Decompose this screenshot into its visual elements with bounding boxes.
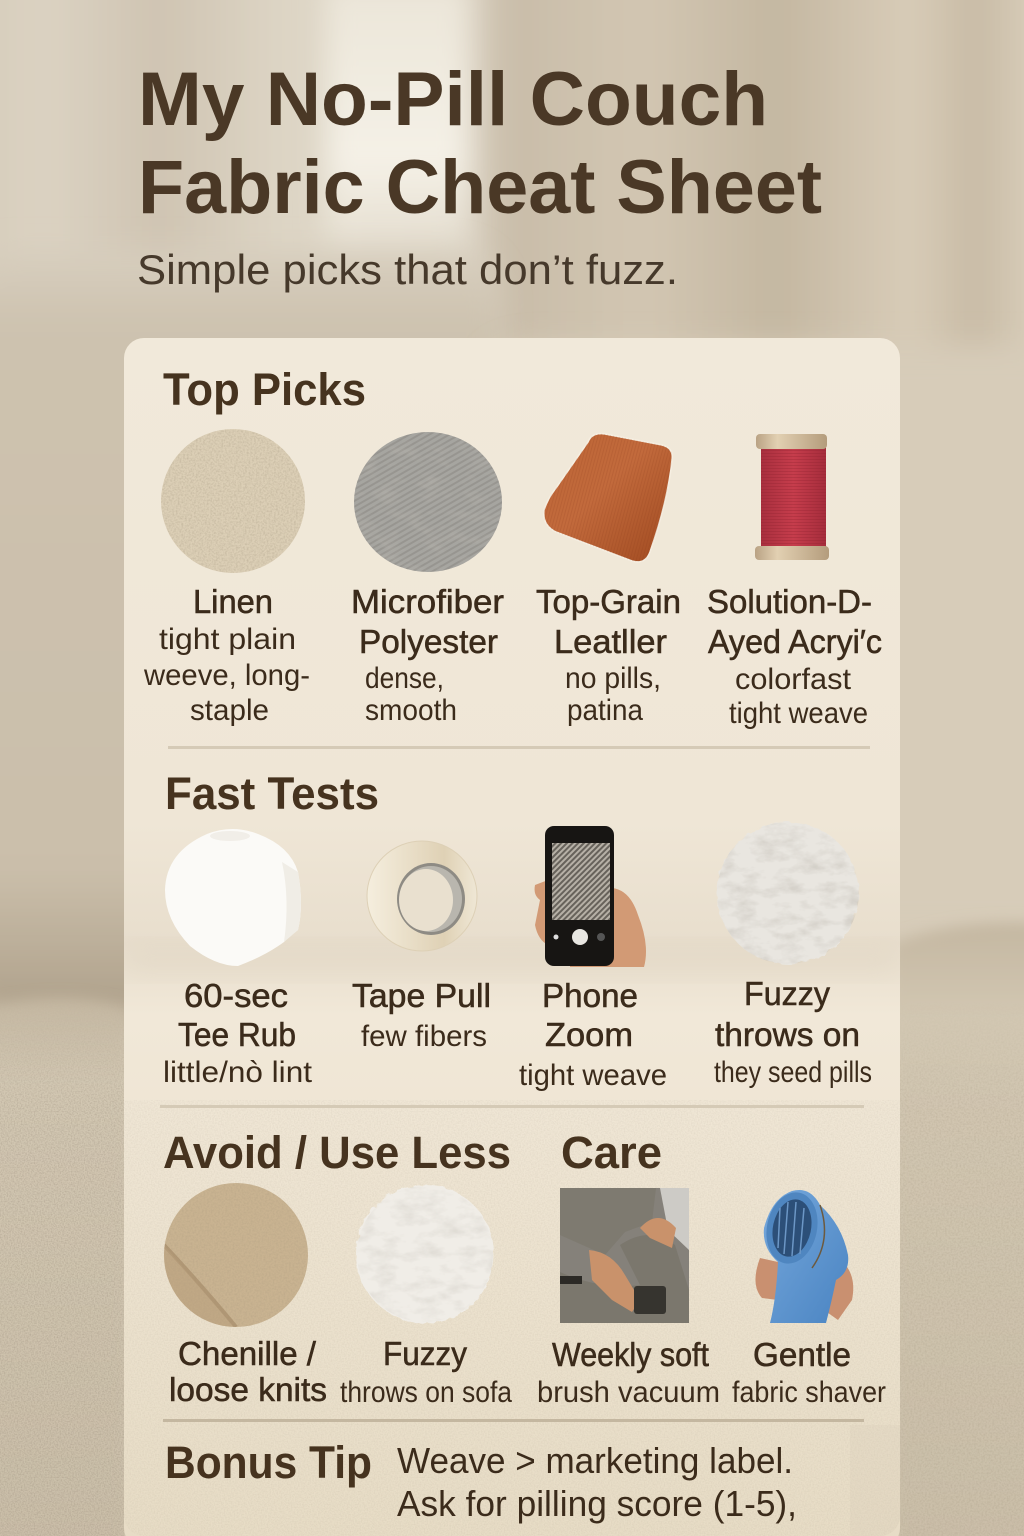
icon: fuzzy throw swatch	[716, 821, 860, 965]
label: fabric shaver: Gentle	[753, 1336, 851, 1373]
label: weekly brush vacuum: brush vacuum	[537, 1376, 720, 1409]
label: fuzzy throws on sofa: throws on sofa	[340, 1376, 512, 1409]
label: weekly brush vacuum	[537, 1336, 720, 1409]
label: microfiber polyester: smooth	[365, 694, 457, 727]
title	[138, 57, 822, 230]
icon: linen swatch	[160, 428, 306, 574]
label: chenille	[169, 1335, 327, 1408]
label: tee rub: 60-sec	[184, 977, 288, 1014]
label: fabric shaver: fabric shaver	[732, 1376, 886, 1409]
text: bonus tip body	[397, 1440, 797, 1524]
heading: Avoid / Use Less: Avoid / Use Less	[163, 1127, 511, 1178]
label: fuzzy throws on sofa: Fuzzy	[383, 1335, 467, 1372]
text: bonus tip body: Ask for pilling score (1-5),	[397, 1483, 797, 1524]
label: fuzzy throws on sofa	[340, 1335, 512, 1409]
label: phone zoom	[519, 977, 667, 1092]
label: fuzzy throws: Fuzzy	[744, 975, 830, 1012]
label: phone zoom: tight weave	[519, 1059, 667, 1092]
icon: tape roll	[367, 841, 477, 951]
label: fuzzy throws: they seed pills	[714, 1056, 872, 1089]
label: chenille: loose knits	[169, 1371, 327, 1408]
icon: microfiber swatch	[354, 432, 502, 572]
label: microfiber polyester: Microfiber	[351, 583, 504, 620]
icon: red thread spool	[755, 434, 829, 560]
label: top-grain leather: patina	[567, 694, 643, 727]
label: linen	[143, 583, 310, 727]
icon: chenille swatch	[164, 1183, 308, 1327]
title: Fabric Cheat Sheet	[138, 145, 822, 230]
icon: fuzzy throw	[352, 1181, 498, 1327]
heading: Bonus Tip: Bonus Tip	[165, 1437, 372, 1488]
label: phone zoom: Phone	[542, 977, 638, 1014]
label: microfiber polyester: Polyester	[359, 623, 498, 660]
label: weekly brush vacuum: Weekly soft	[552, 1336, 709, 1373]
label: linen: weeve, long-	[143, 659, 310, 692]
label: tee rub: little/nò lint	[163, 1056, 313, 1089]
label: linen: tight plain	[159, 623, 296, 656]
label: tape pull	[352, 977, 491, 1053]
heading: Care: Care	[561, 1127, 662, 1178]
icon: white tee	[165, 829, 301, 966]
label: fuzzy throws	[714, 975, 872, 1089]
label: top-grain leather: no pills,	[565, 662, 661, 695]
label: top-grain leather: Top-Grain	[536, 583, 681, 620]
label: solution-dyed acrylic: Ayed Acryi′c	[708, 623, 882, 660]
icon: leather swatch	[544, 434, 672, 562]
label: top-grain leather	[536, 583, 681, 727]
label: solution-dyed acrylic	[707, 583, 882, 730]
label: phone zoom: Zoom	[545, 1016, 633, 1053]
label: tape pull: Tape Pull	[352, 977, 491, 1014]
label: top-grain leather: Leatller	[554, 623, 667, 660]
label: fuzzy throws: throws on	[715, 1016, 860, 1053]
main panel	[124, 338, 900, 1536]
icon: fabric shaver	[755, 1188, 853, 1323]
heading: Fast Tests: Fast Tests	[165, 768, 379, 819]
label: microfiber polyester: dense,	[365, 662, 444, 695]
heading: Top Picks: Top Picks	[163, 364, 366, 415]
label: tee rub	[163, 977, 313, 1089]
label: tape pull: few fibers	[361, 1020, 487, 1053]
label: linen: Linen	[193, 583, 273, 620]
label: linen: staple	[190, 694, 269, 727]
photo: brush vacuum	[560, 1188, 689, 1323]
label: tee rub: Tee Rub	[178, 1016, 296, 1053]
label: solution-dyed acrylic: tight weave	[729, 697, 868, 730]
subtitle: Simple picks that don’t fuzz.	[137, 246, 678, 293]
label: solution-dyed acrylic: colorfast	[735, 663, 852, 696]
label: chenille: Chenille /	[178, 1335, 317, 1372]
text: bonus tip body: Weave > marketing label.	[397, 1440, 793, 1481]
label: fabric shaver	[732, 1336, 886, 1409]
label: solution-dyed acrylic: Solution-D-	[707, 583, 872, 620]
title: My No-Pill Couch	[138, 57, 768, 142]
label: microfiber polyester	[351, 583, 504, 727]
icon: phone in hand	[535, 826, 646, 967]
